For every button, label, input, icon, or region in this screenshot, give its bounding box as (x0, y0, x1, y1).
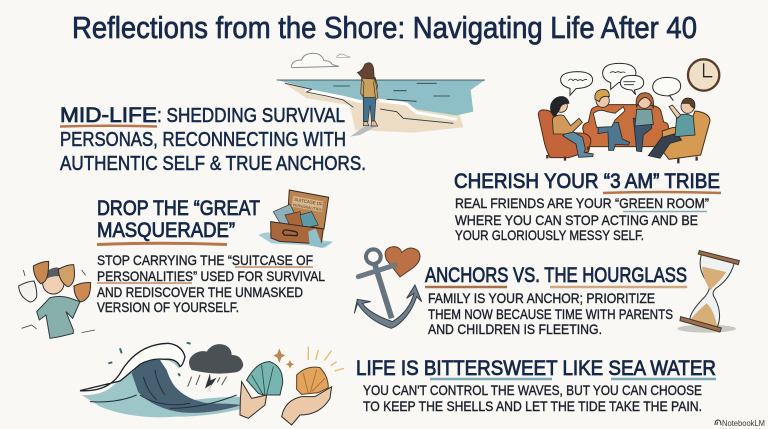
heading: mid-life: MID-LIFE (60, 104, 157, 127)
text: masquerade body: PERSONALITIES” USED FOR SURVIVAL (97, 268, 325, 284)
heading: cherish tribe: CHERISH YOUR “3 AM” TRIBE (454, 170, 720, 193)
heading: mid-life: PERSONAS, RECONNECTING WITH (60, 128, 346, 151)
shell and hand left (240, 348, 294, 418)
sofa and armchairs (538, 105, 710, 163)
shell and hand right (282, 347, 344, 425)
text: cherish tribe body: YOUR GLORIOUSLY MESSY SELF. (455, 227, 644, 243)
heading: masquerade: DROP THE “GREAT (97, 197, 260, 220)
text: anchors body: FAMILY IS YOUR ANCHOR; PRIORITIZE (428, 290, 655, 306)
speech bubbles (561, 63, 681, 101)
icon: suitcase of personalities: PERSONALITIES (292, 203, 322, 212)
text: anchors body: AND CHILDREN IS FLEETING. (428, 321, 602, 337)
text: bittersweet body: TO KEEP THE SHELLS AND LET THE TIDE TAKE THE PAIN. (363, 398, 702, 414)
wave (80, 343, 243, 417)
heading: mid-life: AUTHENTIC SELF & TRUE ANCHORS. (60, 152, 366, 175)
text: cherish tribe body: REAL FRIENDS ARE YOUR “GREEN ROOM” (455, 195, 709, 211)
text: bittersweet body (363, 382, 702, 414)
heading: masquerade: MASQUERADE” (97, 219, 235, 242)
text: masquerade body: VERSION OF YOURSELF. (97, 299, 239, 315)
text: bittersweet body: YOU CAN'T CONTROL THE WAVES, BUT YOU CAN CHOOSE (363, 382, 702, 398)
text: masquerade body: STOP CARRYING THE “SUITCASE OF (97, 252, 313, 268)
icon: suitcase of personalities: SUITCASE OF (294, 197, 323, 207)
illustration: person on the shore (277, 53, 485, 137)
person centre left (593, 89, 630, 150)
person centre right (633, 93, 654, 152)
illustration: friends on a sofa (538, 59, 719, 163)
icon: hourglass (677, 251, 739, 333)
text: cherish tribe body: WHERE YOU CAN STOP ACTING AND BE (455, 212, 698, 228)
text: masquerade body (97, 252, 325, 315)
text: anchors body (428, 290, 673, 337)
text: masquerade body: AND REDISCOVER THE UNMASKED (97, 284, 303, 300)
storm cloud (188, 344, 243, 393)
person right (648, 98, 695, 158)
icon: anchor with heart (354, 247, 422, 328)
heading: mid-life (60, 104, 366, 175)
text: cherish tribe body (455, 195, 709, 243)
person left (550, 97, 593, 157)
icon: person holding masks (19, 261, 95, 338)
icon: suitcase of personalities (258, 190, 333, 248)
title: Reflections from the Shore: Navigating Life After 40 (72, 10, 697, 45)
illustration: wave, storm and shells (80, 343, 344, 425)
heading: anchors vs hourglass: ANCHORS VS. THE HOURGLASS (425, 264, 687, 287)
heading: masquerade (97, 197, 260, 244)
heading: bittersweet: LIFE IS BITTERSWEET LIKE SEA WATER (356, 357, 716, 380)
icon: clock (688, 59, 719, 91)
text: anchors body: THEM NOW BECAUSE TIME WITH PARENTS (428, 306, 673, 322)
heading: mid-life: : SHEDDING SURVIVAL (157, 104, 345, 127)
